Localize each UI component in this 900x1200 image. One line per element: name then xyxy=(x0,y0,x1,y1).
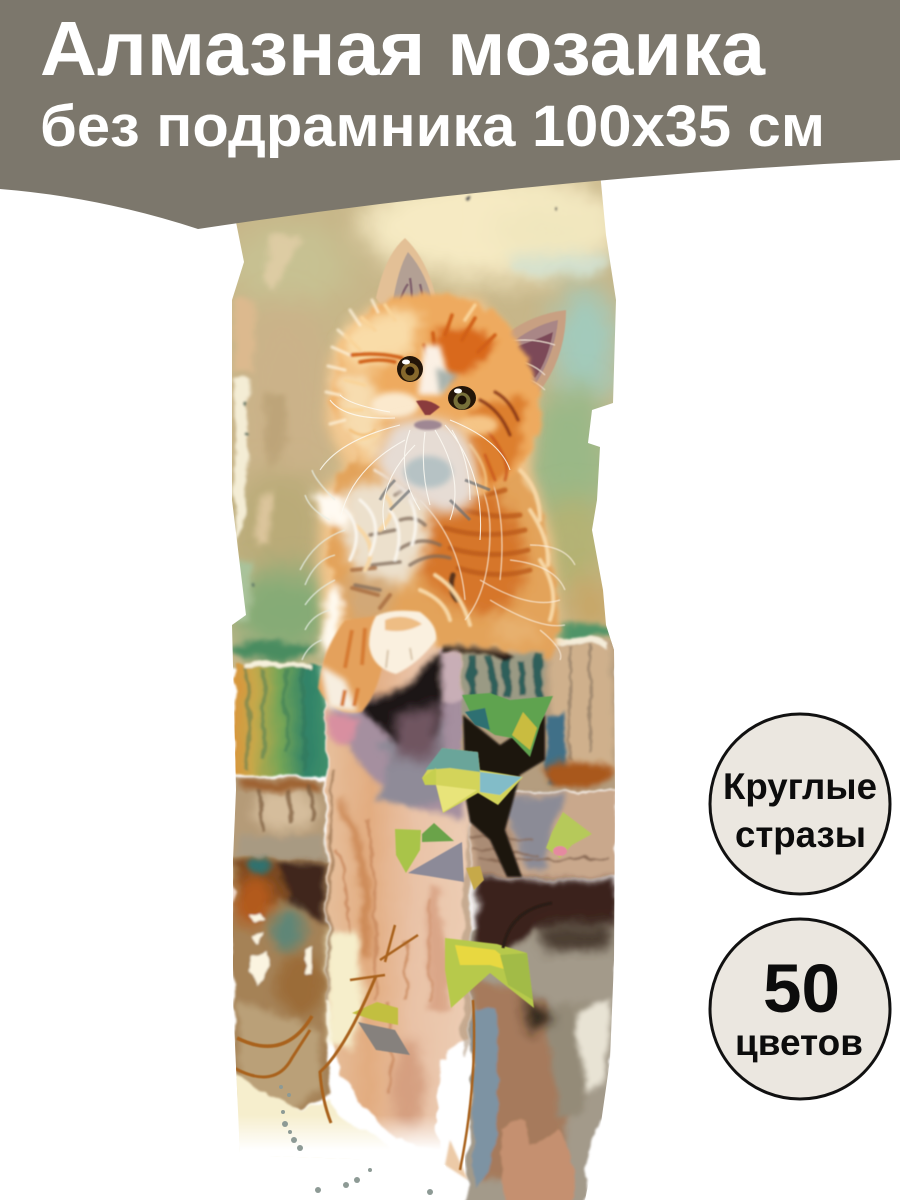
dark stem mass xyxy=(463,715,545,877)
kitten: right eye xyxy=(448,386,476,410)
kitten: head fur strokes xyxy=(326,300,518,490)
kitten: right ear xyxy=(511,310,566,390)
paint splatter dots xyxy=(279,1085,433,1195)
badge: round rhinestones: Круглые xyxy=(723,766,877,807)
fence: left green panel xyxy=(234,659,326,776)
header banner xyxy=(0,0,900,229)
kitten: lower left leg xyxy=(318,615,385,713)
kitten: front paw xyxy=(369,611,436,674)
badge: 50 colours: цветов xyxy=(735,1022,863,1063)
badge: 50 colours: 50 xyxy=(763,950,840,1027)
leaf: lower small with shadow xyxy=(352,1002,410,1055)
kitten: fine hair lines xyxy=(299,470,576,660)
badge: round rhinestones xyxy=(710,714,890,894)
kitten: left ear xyxy=(376,238,434,303)
ivy leaves and stems xyxy=(234,693,592,1170)
orange stems xyxy=(234,903,552,1170)
fence: left dark brown panel xyxy=(233,858,330,1125)
subtitle: без подрамника 100х35 см xyxy=(40,94,825,159)
kitten: left eye xyxy=(397,356,423,382)
leaf: small left with grey shadow xyxy=(395,823,464,882)
bottom cream fade xyxy=(236,1058,473,1180)
painting background wash xyxy=(225,170,625,670)
leaf: blue and yellow xyxy=(422,748,523,813)
central fence post xyxy=(326,640,470,1150)
kitten xyxy=(300,238,575,713)
leaf: top green xyxy=(462,693,553,757)
badge: round rhinestones: стразы xyxy=(735,814,866,855)
kitten: white chin and chest xyxy=(320,395,510,540)
kitten: muzzle and face highlights xyxy=(371,345,498,435)
kitten: body fur strokes xyxy=(345,470,553,625)
fence: right lower plank xyxy=(470,793,617,880)
kitten: nose xyxy=(416,400,440,415)
leaf: big yellow-green xyxy=(445,938,534,1008)
fence: right boards xyxy=(440,635,617,792)
fence: left tan panel xyxy=(233,779,325,863)
kitten: head base xyxy=(330,291,540,496)
title: Алмазная мозаика xyxy=(40,6,766,92)
fence: dark crossbar and lower right wash xyxy=(465,878,617,1200)
kitten: body base xyxy=(310,440,559,656)
leaf: small right xyxy=(546,812,592,858)
badge: 50 colours xyxy=(710,919,890,1099)
leaf: small yellow on post xyxy=(466,866,484,890)
kitten: soft cream halo xyxy=(318,298,560,650)
painting: watercolor kitten on a fence xyxy=(225,170,625,1200)
